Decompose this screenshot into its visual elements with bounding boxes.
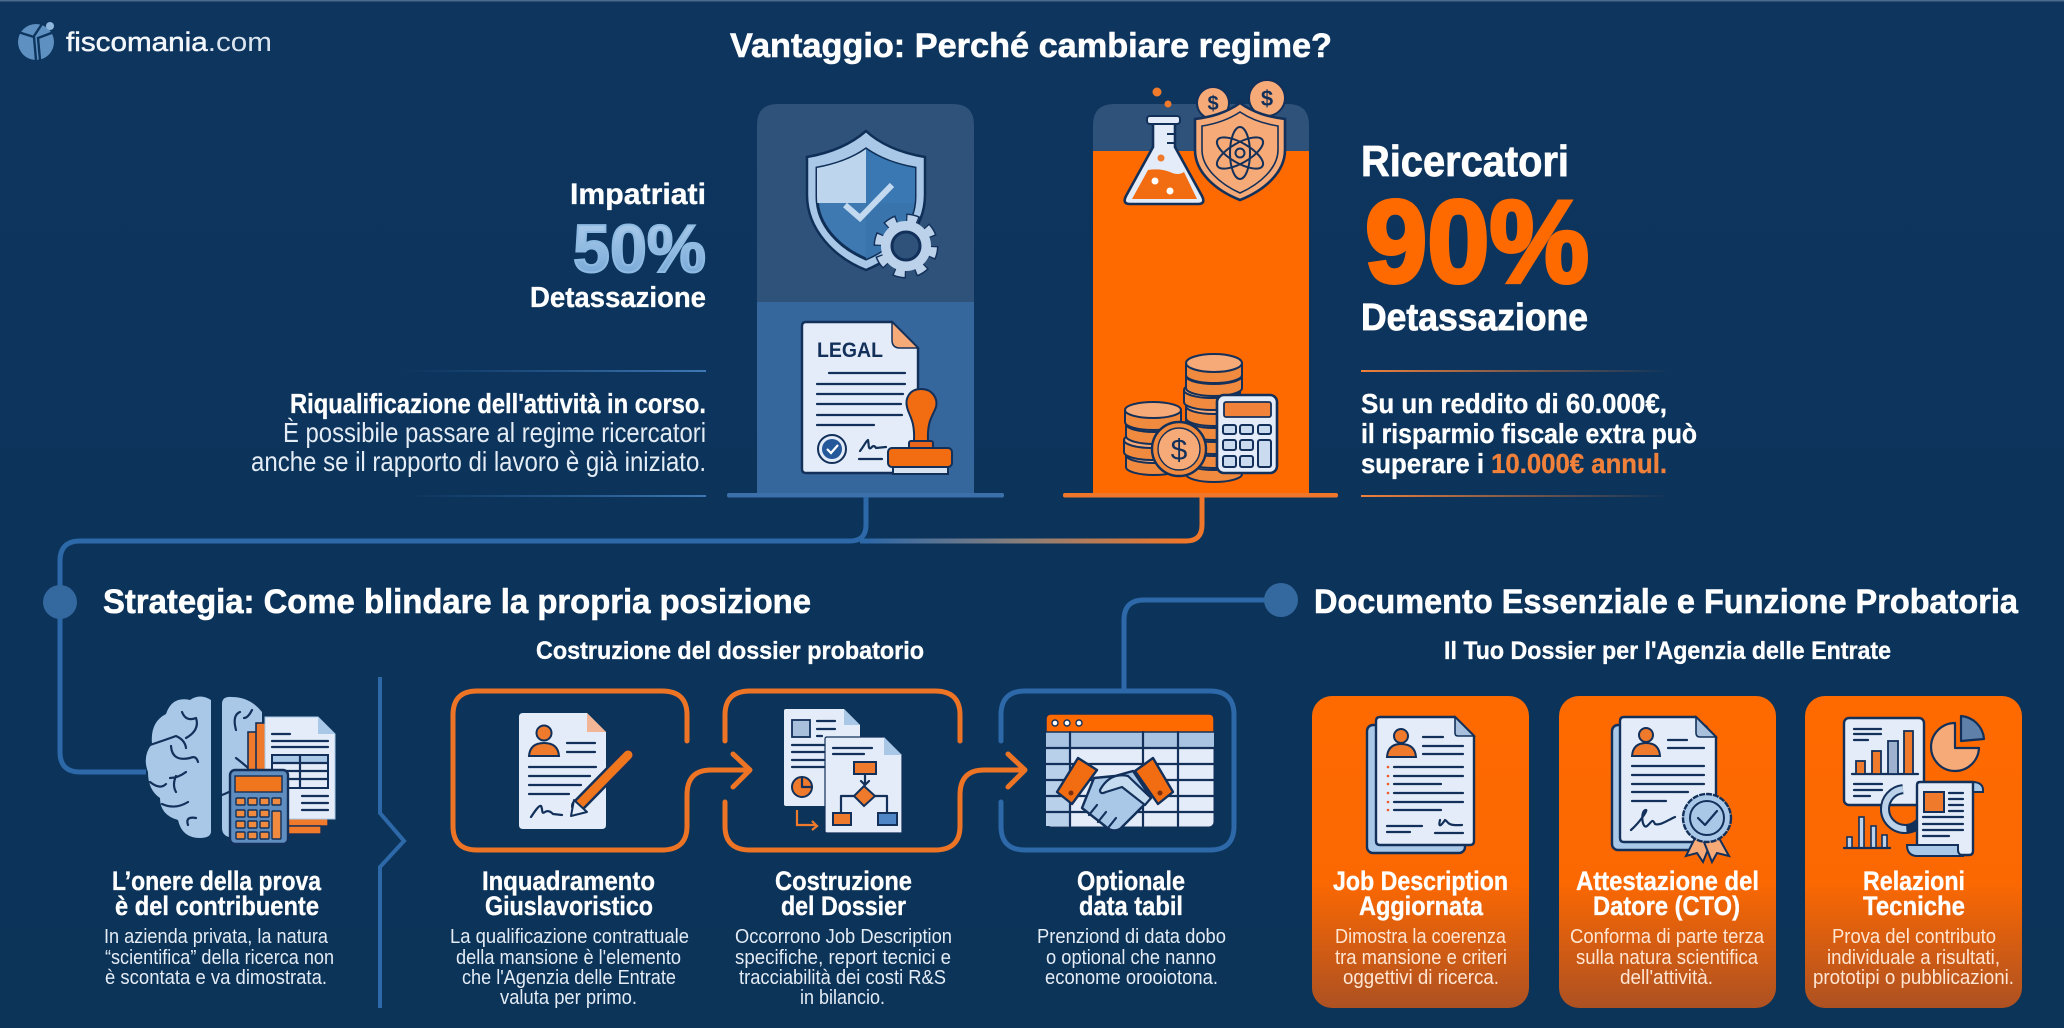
icon: logo mark — [18, 22, 54, 60]
heading: strategia: Strategia: Come blindare la propria posizione — [103, 583, 811, 621]
title: Tecniche — [1863, 891, 1965, 921]
body text: econome orooiotona. — [1045, 966, 1218, 989]
title: data tabil — [1079, 891, 1183, 921]
text block: impatriati — [251, 178, 706, 497]
step: optionale data tabil — [1001, 691, 1234, 989]
title — [482, 866, 655, 921]
icon: strategia node — [43, 585, 77, 619]
description: riqualificazione: anche se il rapporto di lavoro è già iniziato. — [251, 446, 706, 477]
label: Ricercatori: Ricercatori — [1361, 137, 1569, 186]
body text: oggettivi di ricerca. — [1343, 966, 1499, 989]
title — [1333, 866, 1508, 921]
divider with chevron — [380, 677, 404, 1008]
body text — [104, 925, 334, 989]
body text: In azienda privata, la natura — [104, 925, 329, 948]
stat: 50%: 50% — [573, 211, 706, 287]
body text: Conforma di parte terza — [1570, 925, 1765, 948]
step: inquadramento giuslavoristico — [450, 691, 750, 1009]
body text: Occorrono Job Description — [735, 925, 952, 948]
title — [112, 866, 322, 921]
body text: Dimostra la coerenza — [1335, 925, 1507, 948]
title — [1863, 866, 1965, 921]
body text: valuta per primo. — [500, 986, 637, 1009]
panel: ricercatori pillar — [1063, 80, 1338, 498]
title — [1077, 866, 1185, 921]
body text: prototipi o pubblicazioni. — [1813, 966, 2014, 989]
title: Optionale — [1077, 866, 1185, 896]
stat: 90%: 90% — [1365, 176, 1589, 307]
icon: shield with gear — [807, 131, 933, 273]
title: Job Description — [1333, 866, 1508, 896]
icon: table and handshake — [1046, 714, 1214, 830]
title: Inquadramento — [482, 866, 655, 896]
title: Datore (CTO) — [1593, 891, 1740, 921]
icon: reports and charts — [1844, 716, 1984, 856]
title: Aggiornata — [1359, 891, 1484, 921]
description: riqualificazione: È possibile passare al regime ricercatori — [283, 417, 706, 448]
title: L’onere della prova — [112, 866, 322, 896]
body text: dell'attività. — [1620, 966, 1713, 989]
label: Detassazione: Detassazione — [1361, 297, 1588, 339]
icon: legal document with stamp: LEGAL — [817, 339, 883, 362]
body text — [1037, 925, 1226, 989]
body text: o optional che nanno — [1046, 946, 1216, 969]
card: relazioni tecniche — [1805, 696, 2022, 1008]
body text: tra mansione e criteri — [1335, 946, 1507, 969]
connector: ricercatori — [860, 497, 1202, 541]
title: Giuslavoristico — [485, 891, 653, 921]
body text: è scontata e va dimostrata. — [105, 966, 327, 989]
description: riqualificazione — [251, 388, 706, 477]
subheading: dossier probatorio: Costruzione del dossier probatorio — [536, 637, 924, 665]
body text: “scientifica” della ricerca non — [105, 946, 334, 969]
card: attestazione del datore — [1559, 696, 1776, 1008]
body text: individuale a risultati, — [1827, 946, 2000, 969]
title — [1576, 866, 1759, 921]
body text — [450, 925, 689, 1009]
title: è del contribuente — [115, 891, 319, 921]
body text: La qualificazione contrattuale — [450, 925, 689, 948]
icon: atom shield with coins — [1195, 80, 1285, 200]
title: Costruzione — [775, 866, 912, 896]
frame with arrow — [453, 691, 750, 850]
title — [775, 866, 912, 921]
label: Impatriati: Impatriati — [570, 178, 706, 211]
description: risparmio fiscale: il risparmio fiscale extra può — [1361, 418, 1697, 449]
body text — [735, 925, 952, 1009]
subheading: dossier agenzia: Il Tuo Dossier per l'Agenzia delle Entrate — [1444, 637, 1891, 665]
body text: tracciabilità dei costi R&S — [739, 966, 946, 989]
text block: ricercatori — [1361, 137, 1697, 497]
icon: coins and calculator — [1124, 354, 1277, 482]
connector: step to documento — [1124, 583, 1298, 689]
step: costruzione del dossier — [725, 691, 1025, 1009]
description: risparmio fiscale: Su un reddito di 60.000€, — [1361, 388, 1667, 419]
description: risparmio fiscale: superare i 10.000€ annul. — [1361, 448, 1667, 479]
title: Vantaggio: Perché cambiare regime? — [730, 27, 1332, 65]
heading: documento essenziale: Documento Essenziale e Funzione Probatoria — [1314, 583, 2019, 621]
icon: brain with documents — [146, 696, 335, 844]
icon: resume document — [1367, 717, 1474, 853]
icon: flask — [1125, 88, 1203, 204]
panel: impatriati pillar — [727, 104, 1004, 498]
icon: documents and flowchart — [784, 709, 902, 833]
body text: Prenziond di data dobo — [1037, 925, 1226, 948]
description: riqualificazione: Riqualificazione dell'attività in corso. — [290, 388, 706, 419]
icon: legal document with stamp — [802, 322, 952, 474]
connector: impatriati to strategia — [43, 497, 866, 772]
frame with arrow — [725, 691, 1025, 850]
body text: della mansione è l'elemento — [456, 946, 681, 969]
body text: sulla natura scientifica — [1576, 946, 1759, 969]
icon: atom shield with coins: $ — [1261, 86, 1273, 111]
column: onere della prova — [104, 696, 335, 989]
body text — [1813, 925, 2014, 989]
card: job description — [1312, 696, 1529, 1008]
body text: Prova del contributo — [1832, 925, 1996, 948]
logo: fiscomania.com — [18, 22, 272, 60]
label: Detassazione: Detassazione — [530, 282, 706, 314]
icon: certificate — [1612, 717, 1731, 862]
icon: contract and pen — [519, 713, 628, 829]
body text — [1335, 925, 1507, 989]
body text: che l'Agenzia delle Entrate — [462, 966, 676, 989]
title: Relazioni — [1863, 866, 1965, 896]
icon: atom shield with coins: $ — [1207, 93, 1219, 115]
body text: specifiche, report tecnici e — [735, 946, 951, 969]
description: risparmio fiscale — [1361, 388, 1697, 479]
icon: coins and calculator: $ — [1171, 434, 1188, 467]
body text: in bilancio. — [800, 986, 885, 1009]
title: Attestazione del — [1576, 866, 1759, 896]
frame — [1001, 691, 1234, 850]
title: del Dossier — [781, 891, 906, 921]
body text — [1570, 925, 1765, 989]
brand name: fiscomania .com — [66, 27, 272, 57]
